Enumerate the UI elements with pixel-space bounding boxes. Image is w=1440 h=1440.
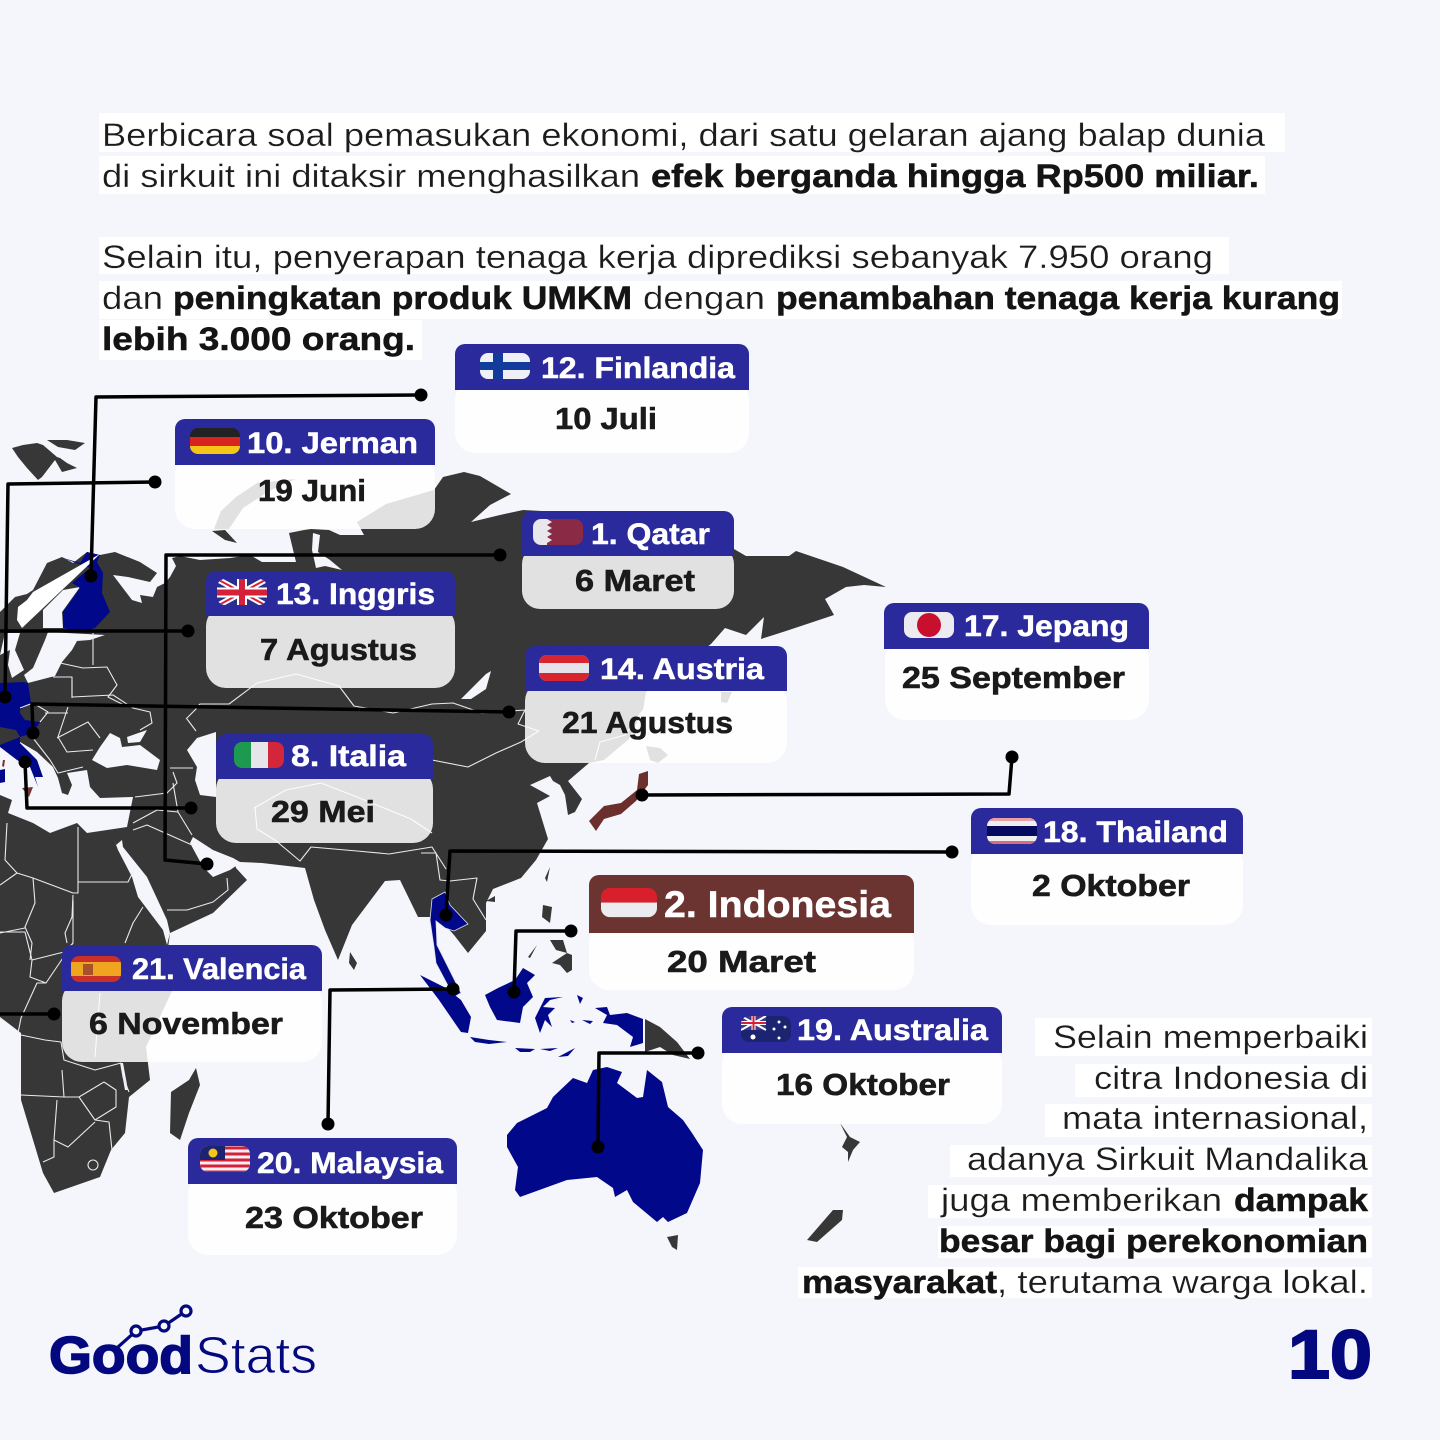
map: Sulawesi — [535, 997, 563, 1033]
card: Australia — [722, 1007, 1002, 1124]
map: Sumatra — [420, 975, 471, 1033]
map: Lake Baikal — [461, 671, 491, 699]
card: Indonesia: 20 Maret — [667, 944, 816, 979]
map: Mediterranean Sea — [0, 742, 133, 833]
card: Finlandia: 10 Juli — [555, 401, 657, 436]
map: Kolguev island — [212, 530, 237, 543]
map: Baltic Sea — [24, 632, 105, 683]
map: Borneo — [485, 968, 535, 1023]
card: Valencia — [62, 945, 322, 1062]
card: Malaysia: 20. Malaysia — [257, 1147, 443, 1180]
flag: Germany — [190, 428, 240, 454]
card: Thailand: 2 Oktober — [1032, 868, 1190, 903]
map: New Zealand — [807, 1123, 860, 1242]
card: Inggris: 13. Inggris — [276, 578, 435, 611]
connector lines with dots — [0, 388, 1018, 1154]
card: Qatar: 1. Qatar — [591, 518, 710, 551]
text block: closing paragraph: citra Indonesia di — [1094, 1060, 1368, 1096]
text block: closing paragraph: adanya Sirkuit Mandalika — [967, 1141, 1368, 1177]
text block: closing paragraph: mata internasional, — [1062, 1100, 1368, 1136]
map: Corsica — [2, 760, 5, 767]
logo: GoodStats: Good — [49, 1327, 193, 1385]
card: Thailand — [971, 808, 1243, 925]
text block: economic impact intro: dan — [102, 280, 163, 316]
map: Hainan and Taiwan — [486, 867, 550, 902]
card: Austria: 21 Agustus — [562, 705, 733, 740]
text block: economic impact intro: lebih 3.000 orang. — [102, 321, 415, 357]
text block: closing paragraph — [798, 1018, 1372, 1300]
text block: closing paragraph: masyarakat — [802, 1264, 997, 1300]
map: Thailand and Malay Peninsula — [430, 892, 468, 997]
map: Sicily — [22, 787, 33, 797]
map: Svalbard — [12, 440, 85, 480]
text block: closing paragraph: besar bagi perekonomian — [939, 1223, 1368, 1259]
card: Australia: 16 Oktober — [776, 1067, 950, 1102]
map: France remnant — [0, 727, 20, 745]
text block: closing paragraph: , terutama warga lokal. — [997, 1264, 1368, 1300]
map: Australia — [507, 1067, 703, 1222]
card: Qatar: 6 Maret — [575, 563, 695, 598]
map: Philippines — [528, 905, 572, 973]
flag: United Kingdom — [217, 579, 267, 606]
card: Malaysia: 23 Oktober — [245, 1200, 423, 1235]
flag: Finland — [480, 353, 530, 379]
text block: economic impact intro: efek berganda hingga Rp500 miliar. — [651, 158, 1259, 194]
page number: 10 — [1288, 1316, 1372, 1393]
card: Jepang: 25 September — [902, 660, 1125, 695]
card: Jerman: 10. Jerman — [247, 427, 418, 460]
world map — [0, 440, 886, 1250]
flag: Austria — [539, 655, 589, 681]
map: Red Sea — [113, 837, 170, 945]
map: Papua New Guinea — [645, 1019, 690, 1059]
logo: GoodStats: Stats — [195, 1327, 317, 1385]
card: Jerman: 19 Juni — [258, 473, 366, 508]
map: Gulf of Ob — [312, 533, 342, 570]
flag: Australia — [741, 1016, 791, 1043]
text block: economic impact intro: peningkatan produk UMKM — [173, 280, 632, 316]
card: Jepang: 17. Jepang — [964, 610, 1129, 643]
card: Thailand: 18. Thailand — [1043, 816, 1228, 849]
map: Tasmania — [667, 1235, 678, 1250]
card: Austria: 14. Austria — [600, 653, 764, 686]
card: Inggris — [206, 571, 455, 688]
card: Indonesia: 2. Indonesia — [664, 884, 891, 925]
map: Persian Gulf — [190, 837, 240, 877]
flag: Thailand — [987, 818, 1037, 844]
map: Papua — [595, 1007, 643, 1047]
map: Caspian Sea — [187, 732, 216, 797]
flag: Japan — [904, 612, 954, 638]
map: Sri Lanka — [349, 952, 357, 970]
card: Valencia: 21. Valencia — [132, 953, 306, 986]
map: Novaya Zemlya — [214, 479, 296, 529]
map: Gulf of Bothnia — [43, 587, 80, 628]
card: Finlandia: 12. Finlandia — [541, 352, 735, 385]
map: Sakhalin and Hokkaido — [646, 692, 732, 763]
map: country borders — [0, 633, 643, 1170]
flag: Italy — [234, 742, 284, 769]
map: white wedge over Scandinavia — [17, 554, 100, 628]
map: Lake Malawi — [120, 1063, 128, 1090]
card: Australia: 19. Australia — [797, 1014, 988, 1047]
card: Jerman — [175, 419, 435, 529]
map: North Sea — [0, 633, 24, 678]
card: Qatar — [522, 511, 734, 609]
icon: logo trend line — [118, 1306, 191, 1347]
card: Austria — [525, 646, 787, 763]
map: Madagascar — [170, 1068, 200, 1140]
map: Indonesian small islands — [515, 995, 593, 1057]
text block: closing paragraph: juga memberikan — [940, 1182, 1222, 1218]
card: Italia: 8. Italia — [291, 740, 406, 773]
text block: economic impact intro: Berbicara soal pemasukan ekonomi, dari satu gelaran ajang balap dunia — [102, 117, 1265, 153]
flag: Spain — [71, 956, 121, 982]
card: Jepang — [884, 603, 1149, 720]
card: Inggris: 7 Agustus — [260, 632, 417, 667]
flag: Malaysia — [200, 1146, 250, 1173]
card: Italia — [216, 734, 433, 843]
map: Japan — [589, 771, 648, 831]
logo: GoodStats — [49, 1306, 317, 1385]
map: Finland — [60, 552, 110, 632]
text block: closing paragraph: Selain memperbaiki — [1053, 1019, 1368, 1055]
text block: economic impact intro: di sirkuit ini ditaksir menghasilkan — [102, 158, 640, 194]
card: Italia: 29 Mei — [271, 794, 375, 829]
text block: economic impact intro: Selain itu, penyerapan tenaga kerja diprediksi sebanyak 7.950 orang — [102, 239, 1213, 275]
text block: closing paragraph: dampak — [1234, 1182, 1368, 1218]
text block: economic impact intro: dengan — [643, 280, 765, 316]
flag: Qatar — [533, 519, 583, 545]
map: Eurasia and Africa landmass — [0, 472, 886, 1193]
map: Sardinia — [0, 769, 5, 783]
card: Valencia: 6 November — [89, 1006, 283, 1041]
card: Finlandia — [455, 344, 749, 453]
card: Malaysia — [188, 1138, 457, 1255]
map: Germany and Italy — [0, 682, 43, 787]
card: Indonesia — [589, 875, 914, 990]
flag: Indonesia — [601, 888, 657, 918]
map: Black Sea — [92, 733, 160, 770]
map: Java — [470, 1037, 507, 1044]
map: Sea of Azov — [127, 730, 147, 743]
text block: economic impact intro: penambahan tenaga kerja kurang — [776, 280, 1340, 316]
text block: economic impact intro — [99, 113, 1342, 360]
